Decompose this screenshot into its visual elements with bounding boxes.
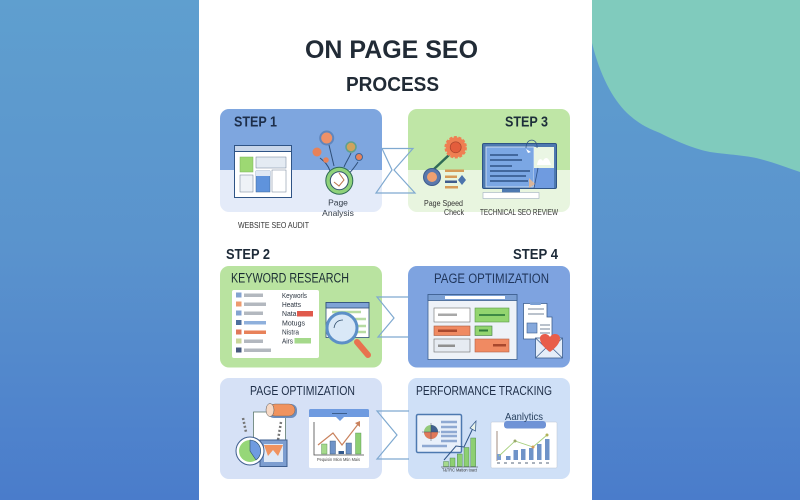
keyword list card: Keyworls xyxy=(282,291,307,300)
step 4 label: STEP 4 xyxy=(513,246,559,263)
panel: step 3: Check xyxy=(444,208,465,217)
icon: magnifier over browser xyxy=(326,302,369,355)
background: left blue band xyxy=(0,0,199,500)
icon: page speed gears xyxy=(424,137,466,188)
panel: keyword research xyxy=(220,266,382,368)
panel: page optimization lower xyxy=(220,378,382,479)
keyword list card: Airs xyxy=(282,336,293,346)
title: ON PAGE SEO xyxy=(305,36,478,64)
heading: page optimization: PAGE OPTIMIZATION xyxy=(434,271,549,286)
icon: document and heart envelope xyxy=(524,302,562,358)
step 2 label: STEP 2 xyxy=(226,246,270,263)
caption: website seo audit: WEBSITE SEO AUDIT xyxy=(238,221,309,230)
analytics chart card: Aanlytics xyxy=(505,411,543,423)
subtitle: PROCESS xyxy=(346,73,439,96)
browser with content blocks xyxy=(428,294,517,360)
heading: keyword research: KEYWORD RESEARCH xyxy=(231,270,349,286)
arrow: step 1 to step 3 connector xyxy=(376,148,415,193)
keyword list card: Heatts xyxy=(282,300,301,309)
icon: website audit browser xyxy=(234,146,292,198)
icon: dashboard screen xyxy=(416,414,462,452)
icon: green growth bars with arrow: T&TRC Mation toact xyxy=(442,468,478,472)
white centre page xyxy=(199,0,592,500)
bar chart card: Pequisin Mion Mtin Mais xyxy=(317,457,361,462)
panel: page optimization step 4 xyxy=(408,266,570,368)
background: right blue band with teal wave xyxy=(592,0,800,500)
step 3 label: STEP 3 xyxy=(505,114,548,130)
icon: technical review monitor xyxy=(482,140,556,198)
icon: document, cylinder and pie chart xyxy=(236,404,297,466)
panel: step 1 xyxy=(220,109,382,218)
analytics chart card xyxy=(491,411,557,468)
keyword list card xyxy=(232,290,319,358)
arrow: lower panels connector xyxy=(377,411,409,459)
icon: green growth bars with arrow xyxy=(441,421,478,472)
arrow: step 2 to step 4 connector xyxy=(377,297,409,337)
caption: page speed check: Page Speed xyxy=(424,199,463,208)
keyword list card: Nistra xyxy=(282,328,300,336)
panel: performance tracking xyxy=(408,378,570,479)
heading: page optimization lower: PAGE OPTIMIZATION xyxy=(250,384,355,398)
panel: step 3 xyxy=(408,109,570,217)
heading: performance tracking: PERFORMANCE TRACKING xyxy=(416,384,552,398)
icon: page analysis xyxy=(312,132,362,194)
caption: page analysis: Page xyxy=(328,198,348,208)
bar chart card xyxy=(309,409,369,468)
keyword list card: Motugs xyxy=(282,318,305,328)
panel: step 1: Analysis xyxy=(322,208,354,218)
caption: technical seo review: TECHNICAL SEO REVIEW xyxy=(480,208,558,217)
step 1 label: STEP 1 xyxy=(234,114,277,130)
keyword list card: Nata xyxy=(282,309,297,318)
